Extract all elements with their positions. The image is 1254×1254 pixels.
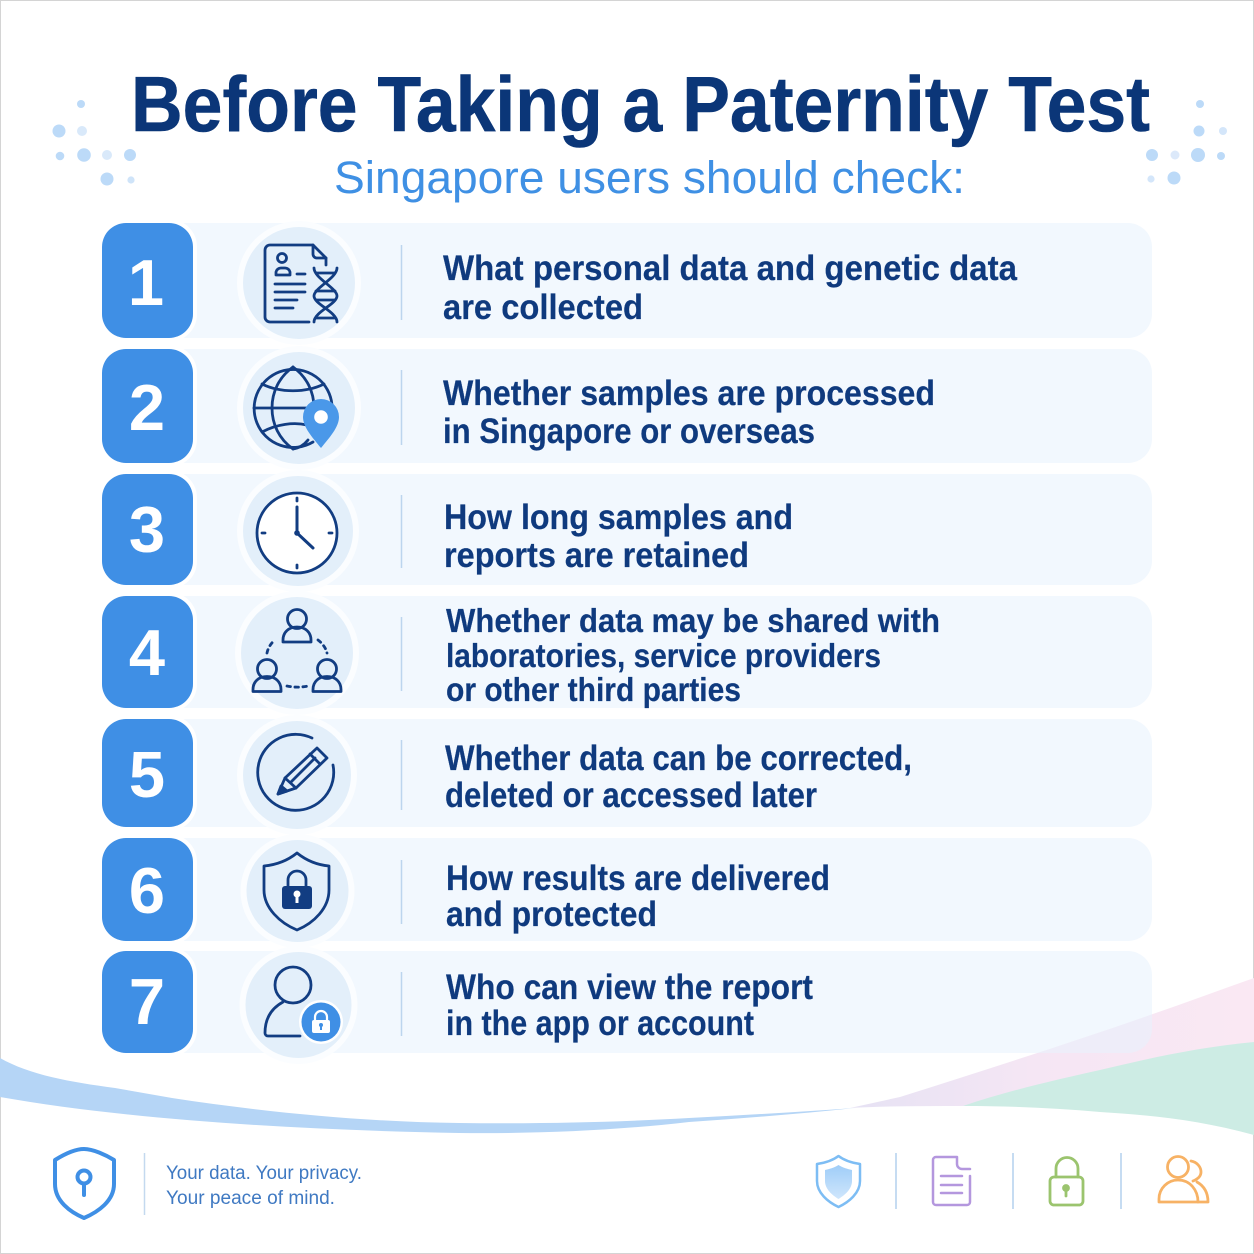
row 7 background <box>150 951 1152 1053</box>
icon: footer padlock <box>1050 1158 1083 1205</box>
row 1 text <box>443 249 1017 327</box>
decorative dots: right <box>1146 100 1227 184</box>
icon: footer people <box>1159 1156 1208 1202</box>
icon: document with DNA <box>237 221 361 345</box>
decorative dots: left <box>52 100 136 186</box>
row 3 <box>102 470 1152 592</box>
row 3 text: How long samples and <box>444 498 793 537</box>
icon: footer document <box>933 1157 970 1205</box>
row 1 <box>102 221 1152 345</box>
row 6 text <box>446 859 830 934</box>
row 6 number badge: 6 <box>129 854 165 927</box>
row 7 text: Who can view the report <box>446 968 813 1007</box>
row 4 number badge <box>102 596 193 708</box>
icon: footer shield <box>817 1156 860 1207</box>
row 6 <box>102 834 1152 948</box>
background waves <box>0 978 1254 1135</box>
divider <box>400 617 402 691</box>
row 2 number badge: 2 <box>129 371 165 444</box>
row 4 text: or other third parties <box>446 671 741 708</box>
divider <box>400 972 402 1036</box>
row 7 number badge: 7 <box>129 965 165 1038</box>
row 1 background <box>150 223 1152 338</box>
row 2 text: in Singapore or overseas <box>443 412 815 451</box>
row 5 <box>102 715 1152 835</box>
row 7 <box>102 946 1152 1064</box>
row 4 number badge: 4 <box>129 616 165 689</box>
row 2 <box>102 346 1152 470</box>
row 1 text: What personal data and genetic data <box>443 249 1017 288</box>
row 7 text <box>446 968 813 1043</box>
row 4 text <box>446 602 940 708</box>
row 6 text: How results are delivered <box>446 859 830 898</box>
subtitle: Singapore users should check: <box>334 152 965 203</box>
footer tagline <box>166 1163 362 1209</box>
row 1 number badge: 1 <box>128 246 164 319</box>
row 6 number badge <box>102 838 193 941</box>
row 2 text <box>443 374 935 451</box>
divider <box>400 370 402 445</box>
footer: keyhole shield logo <box>55 1149 114 1218</box>
row 4 text: Whether data may be shared with <box>446 602 940 639</box>
icon: clock <box>237 470 359 592</box>
divider <box>400 495 402 568</box>
row 4 text: laboratories, service providers <box>446 637 881 674</box>
icon: three connected people <box>235 591 359 715</box>
row 6 text: and protected <box>446 895 657 934</box>
row 3 number badge: 3 <box>129 493 165 566</box>
row 7 text: in the app or account <box>446 1004 754 1043</box>
divider <box>400 740 402 810</box>
divider <box>400 860 402 924</box>
icon: pencil in circle <box>237 715 357 835</box>
row 3 background <box>150 474 1152 585</box>
row 1 number badge <box>102 223 193 338</box>
icon: user with padlock <box>240 946 358 1064</box>
row 3 number badge <box>102 474 193 585</box>
footer tagline: Your peace of mind. <box>166 1188 335 1209</box>
row 4 background <box>150 596 1152 708</box>
icon: shield with padlock <box>240 834 354 948</box>
row 5 text: deleted or accessed later <box>445 776 817 815</box>
title: Before Taking a Paternity Test <box>131 60 1150 148</box>
row 5 text: Whether data can be corrected, <box>445 739 912 778</box>
row 2 background <box>150 349 1152 463</box>
footer tagline: Your data. Your privacy. <box>166 1163 362 1184</box>
row 5 number badge: 5 <box>129 738 165 811</box>
row 3 text <box>444 498 793 575</box>
row 3 text: reports are retained <box>444 536 749 575</box>
row 2 number badge <box>102 349 193 463</box>
row 5 background <box>150 719 1152 827</box>
row 6 background <box>150 838 1152 941</box>
row 2 text: Whether samples are processed <box>443 374 935 413</box>
row 1 text: are collected <box>443 288 643 327</box>
icon: globe with pin <box>237 346 361 470</box>
row 5 text <box>445 739 912 815</box>
row 5 number badge <box>102 719 193 827</box>
divider <box>400 245 402 320</box>
row 4 <box>102 591 1152 715</box>
row 7 number badge <box>102 951 193 1053</box>
